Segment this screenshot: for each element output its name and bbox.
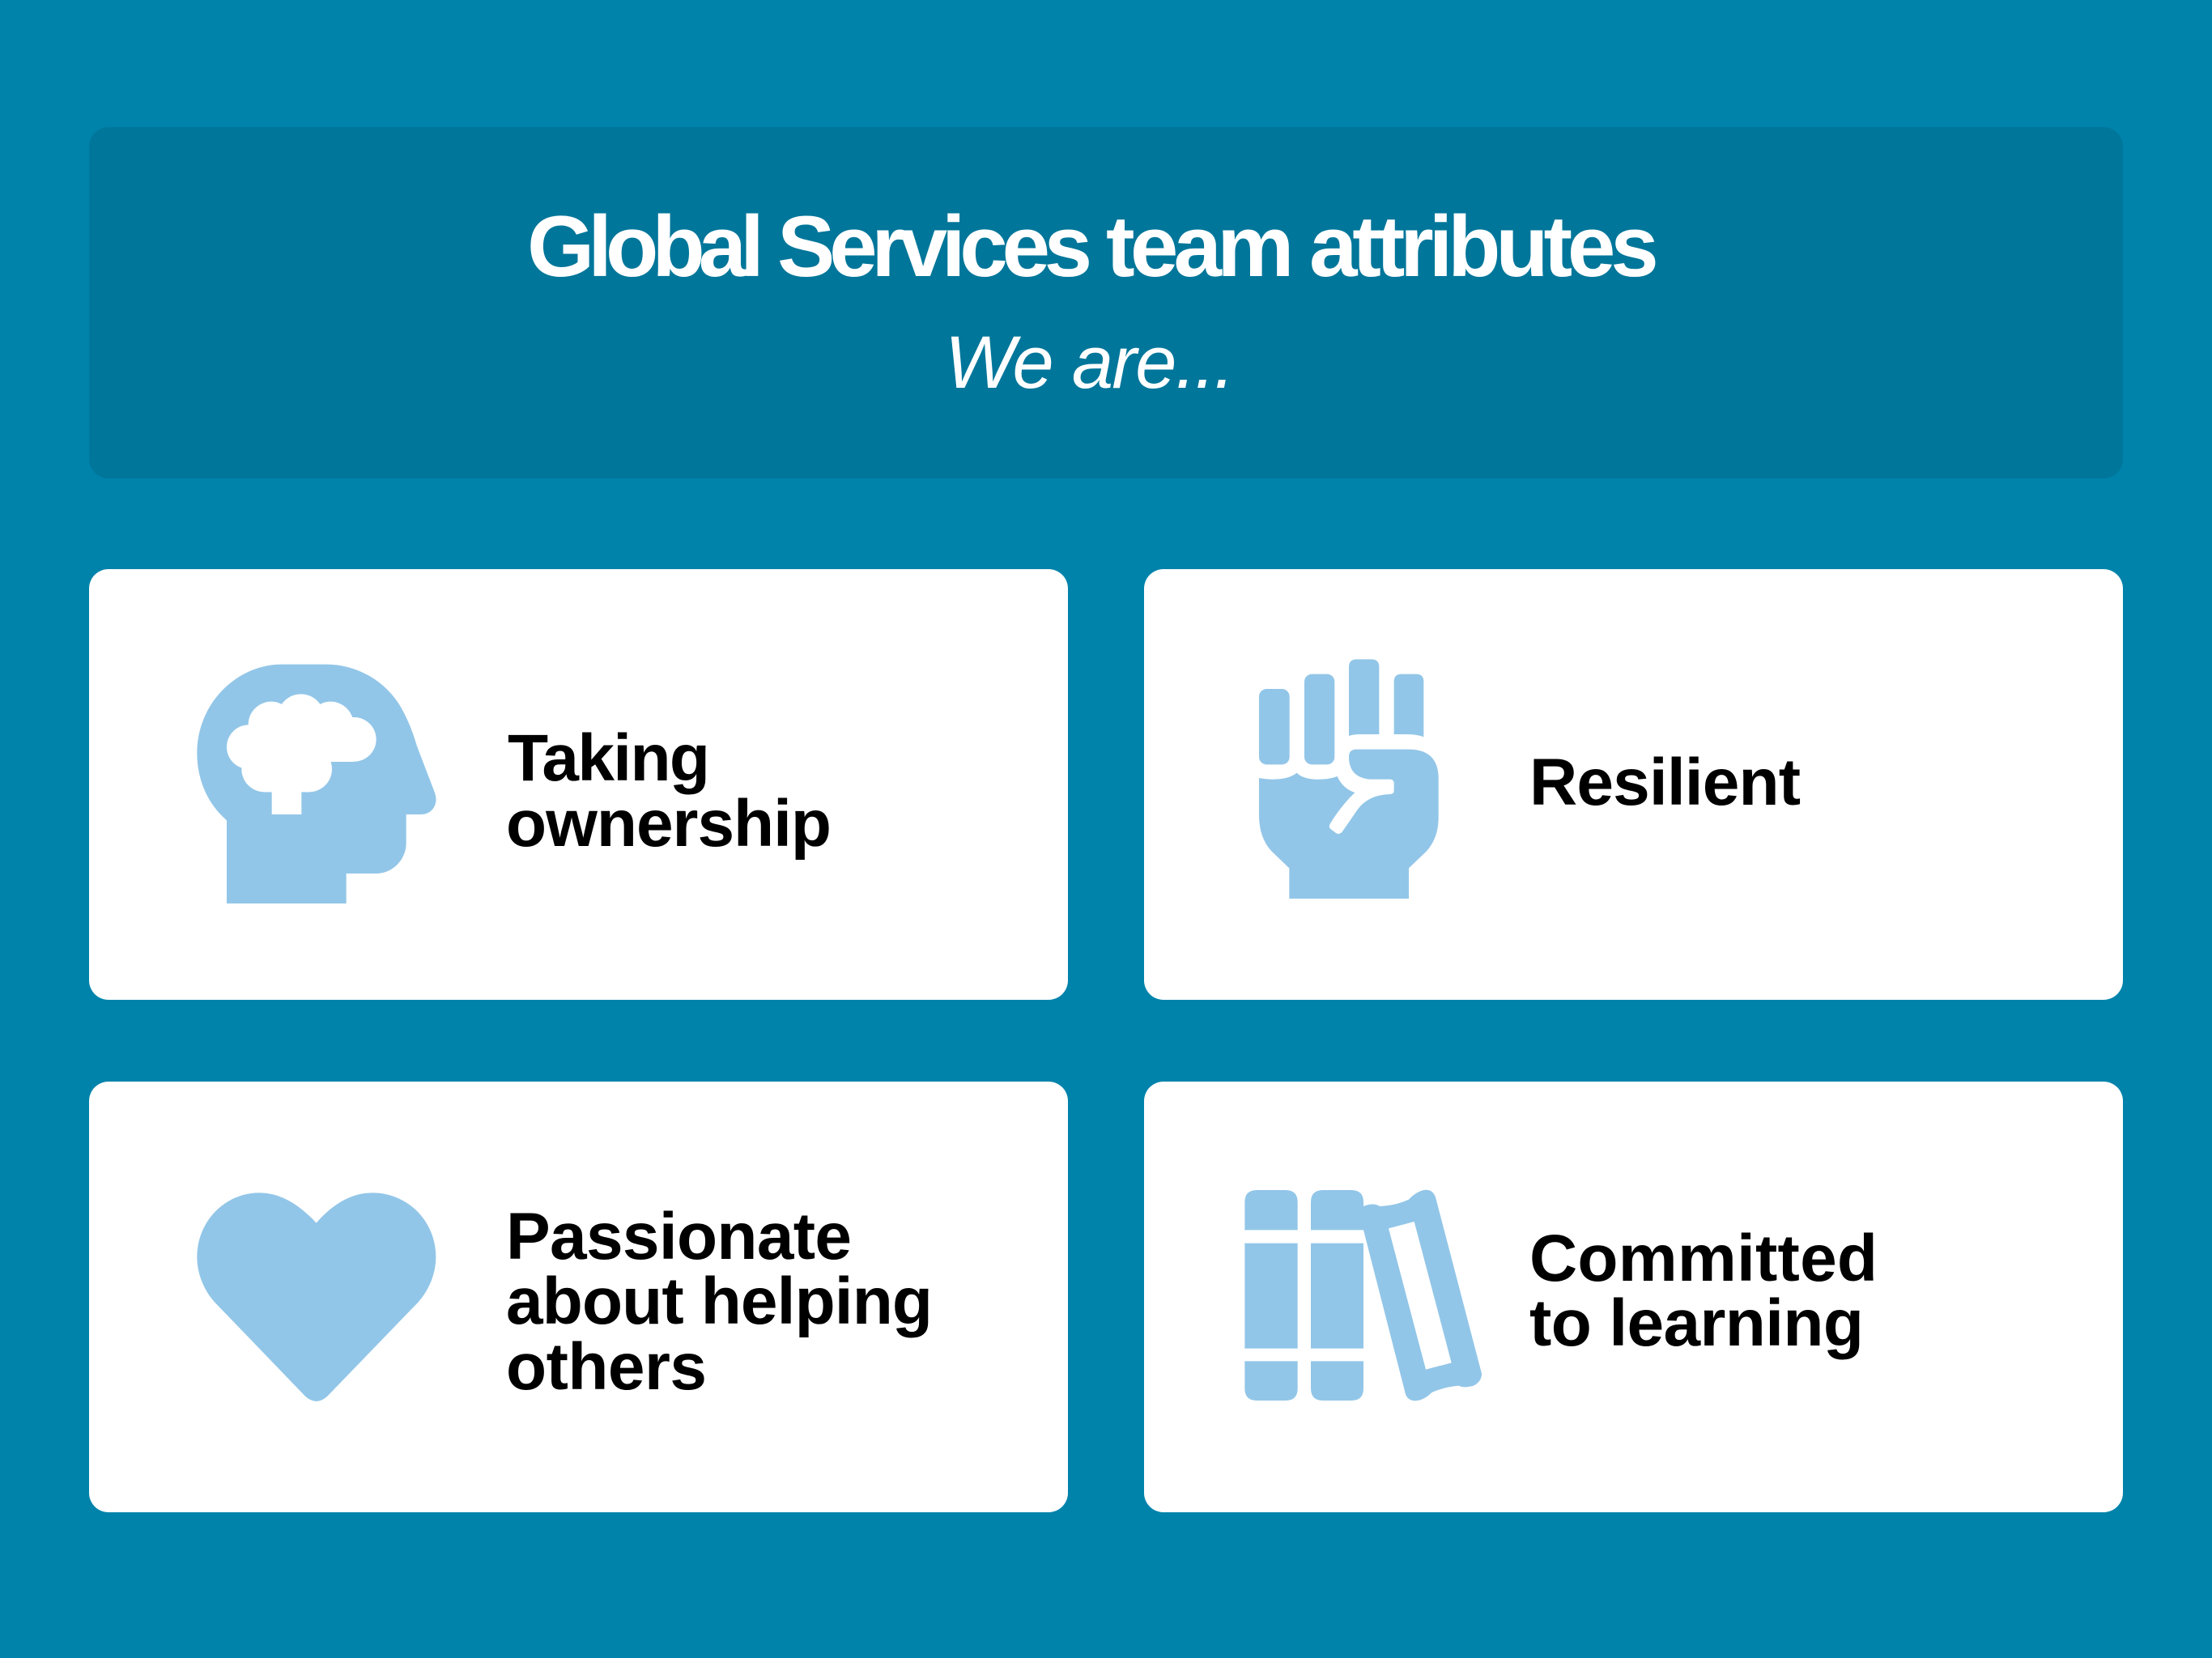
icon: heart (197, 1192, 436, 1401)
label: passionate about helping others: Passionate (506, 1200, 852, 1273)
panel: resilient (1144, 569, 2123, 1000)
label: taking ownership (506, 721, 832, 861)
panel: committed to learning (1144, 1082, 2123, 1512)
title: team (1106, 198, 1290, 295)
label: taking ownership: Taking (508, 721, 710, 795)
icon: head with brain (197, 665, 436, 903)
icon: books (1244, 1190, 1482, 1401)
label: resilient: Resilient (1529, 746, 1801, 819)
panel: taking ownership (89, 569, 1068, 1000)
label: committed to learning: Committed (1529, 1222, 1878, 1295)
label: passionate about helping others (506, 1200, 933, 1404)
label: taking ownership: ownership (506, 787, 832, 861)
panel: passionate about helping others (89, 1082, 1068, 1512)
label: passionate about helping others: about helping (506, 1265, 933, 1338)
subtitle: We are... (945, 321, 1235, 404)
title: attributes (1309, 198, 1656, 295)
label: committed to learning: to learning (1529, 1286, 1864, 1360)
panel: header (89, 127, 2123, 478)
title: Global (527, 198, 759, 295)
title: Services (777, 198, 1090, 295)
label: committed to learning (1529, 1222, 1878, 1360)
label: passionate about helping others: others (506, 1330, 707, 1404)
icon: raised fist (1259, 659, 1439, 899)
